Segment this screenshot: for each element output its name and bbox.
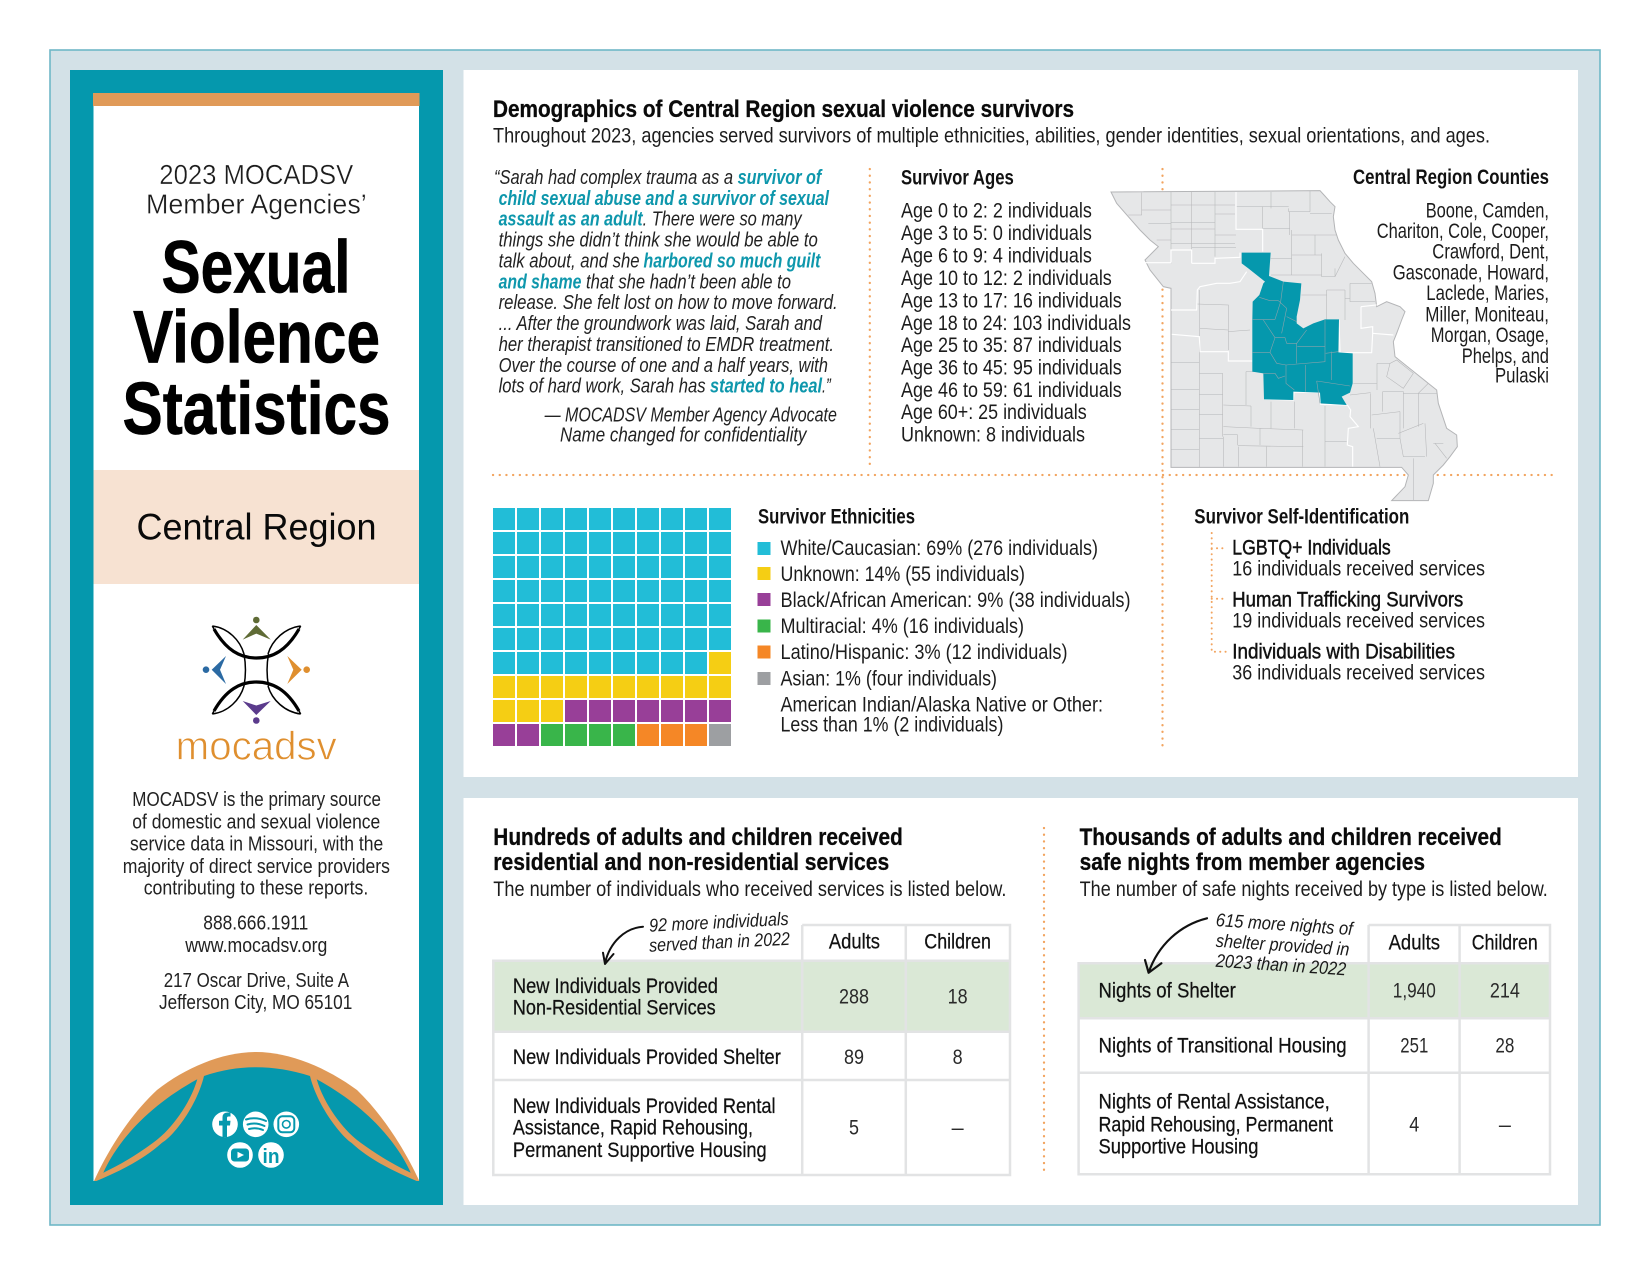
survivor quote: her therapist transitioned to EMDR treatment. [499,333,834,356]
table: individuals served: Non-Residential Services [513,997,716,1020]
survivor quote: things she didn’t think she would be able to [499,229,818,252]
about text: contributing to these reports. [144,877,368,900]
ethnicity legend: Unknown: 14% (55 individuals) [780,563,1025,586]
icon: linkedin: in [262,1146,280,1168]
survivor quote: .” [822,375,832,398]
survivor ages list: Survivor Ages [901,165,1014,189]
table: individuals served: 18 [948,986,968,1009]
map heading and county list: Morgan, Osage, [1431,324,1549,347]
survivor self-identification: 16 individuals received services [1232,558,1485,581]
contact details: 217 Oscar Drive, Suite A [164,969,349,992]
region banner: Central Region [136,507,376,548]
ethnicity legend [758,504,1130,737]
ethnicity legend: Survivor Ethnicities [758,504,915,528]
contact details: 888.666.1911 [203,912,308,935]
survivor ages list: Unknown: 8 individuals [901,424,1085,446]
table: safe nights: 28 [1495,1034,1514,1057]
ethnicity legend: Less than 1% (2 individuals) [780,714,1003,737]
table: individuals served: 8 [953,1046,963,1069]
survivor ages list: Age 25 to 35: 87 individuals [901,334,1122,357]
map heading and county list: Pulaski [1495,365,1549,388]
residential services heading [493,824,1006,901]
callout: 615 more nights: shelter provided in [1215,930,1350,960]
about text: of domestic and sexual violence [132,810,380,833]
sidebar title: Member Agencies’ [146,188,367,220]
map heading and county list: Central Region Counties [1353,165,1549,189]
about text: majority of direct service providers [123,855,390,878]
map heading and county list [1353,165,1549,388]
icon: linkedin [258,1142,284,1168]
table: safe nights: Nights of Transitional Housing [1098,1034,1347,1057]
icon: facebook [212,1112,238,1137]
table: safe nights: 1,940 [1393,979,1436,1002]
survivor ages list [901,165,1131,447]
safe nights heading: Thousands of adults and children received [1080,824,1502,851]
survivor quote: started to heal [710,375,823,398]
demographics heading: Demographics of Central Region sexual violence survivors [493,96,1074,123]
survivor self-identification [1194,504,1485,684]
sidebar title [122,159,390,450]
table: individuals served: Adults [829,930,880,954]
ethnicity legend: Asian: 1% (four individuals) [780,668,997,691]
survivor self-identification: Human Trafficking Survivors [1232,589,1463,612]
section dividers [493,169,1552,747]
map heading and county list: Crawford, Dent, [1432,240,1549,264]
table: individuals served: Permanent Supportive Housing [513,1139,767,1162]
safe nights heading: The number of safe nights received by type is listed below. [1080,878,1548,901]
survivor ages list: Age 10 to 12: 2 individuals [901,267,1112,290]
ethnicity legend: Latino/Hispanic: 3% (12 individuals) [780,641,1068,664]
table: individuals served: 5 [849,1117,859,1140]
residential services heading: Hundreds of adults and children received [493,824,903,851]
survivor quote: harbored so much guilt [644,250,821,272]
survivor ages list: Age 36 to 45: 95 individuals [901,356,1122,380]
icon: spotify [243,1112,268,1137]
sidebar title: Statistics [122,367,390,450]
map heading and county list: Gasconade, Howard, [1393,261,1549,284]
table: individuals served: New Individuals Provided Rental [513,1095,776,1118]
table: safe nights: Nights of Shelter [1098,979,1236,1002]
demographics heading [493,96,1490,148]
ethnicity legend: Multiracial: 4% (16 individuals) [780,615,1024,638]
table: individuals served: 89 [844,1046,864,1069]
table: individuals served: Children [924,930,991,954]
map heading and county list: Chariton, Cole, Cooper, [1377,220,1549,243]
arrow: callout to first row [603,927,643,964]
region banner [94,470,419,584]
demographics heading: Throughout 2023, agencies served survivors of multiple ethnicities, abilities, gender identities, sexual orientations, and ages. [493,125,1490,148]
table: individuals served: 288 [839,986,869,1009]
callout: 615 more nights: 2023 than in 2022 [1214,950,1347,979]
sidebar title: 2023 MOCADSV [159,159,354,190]
ethnicity legend: Black/African American: 9% (38 individuals) [780,589,1130,612]
callout: 615 more nights [1145,909,1355,979]
map heading and county list: Phelps, and [1462,345,1549,368]
icon: instagram [274,1112,299,1137]
table: individuals served: Assistance, Rapid Rehousing, [513,1117,753,1140]
survivor ages list: Age 6 to 9: 4 individuals [901,244,1092,267]
ethnicity legend: American Indian/Alaska Native or Other: [780,694,1103,717]
table: safe nights [1079,925,1550,1174]
residential services heading: residential and non-residential services [493,849,889,876]
waffle chart: ethnicities [493,508,731,746]
sidebar title: Sexual [162,226,350,309]
survivor ages list: Age 13 to 17: 16 individuals [901,290,1122,312]
table: individuals served: New Individuals Provided Shelter [513,1046,781,1069]
central region highlight [1242,253,1353,405]
safe nights heading [1080,824,1548,901]
survivor quote [494,166,838,447]
about text: MOCADSV is the primary source [132,788,381,811]
safe nights heading: safe nights from member agencies [1080,849,1425,876]
survivor quote: that she hadn’t been able to [586,270,791,293]
decorative dome with social icons [94,1052,419,1182]
logo: mocadsv [176,617,337,768]
table: safe nights: Adults [1389,932,1440,954]
icon: youtube [227,1142,253,1168]
callout: 92 more individuals [603,908,791,964]
table: safe nights: Nights of Rental Assistance, [1098,1091,1330,1114]
residential services heading: The number of individuals who received services is listed below. [493,878,1006,901]
panel: services [464,798,1578,1205]
survivor ages list: Age 18 to 24: 103 individuals [901,312,1131,335]
callout: 615 more nights: 615 more nights of [1215,909,1355,939]
table: safe nights: 214 [1490,979,1520,1002]
logo: mocadsv: mocadsv [176,724,337,768]
survivor quote: lots of hard work, Sarah has [499,375,706,398]
survivor self-identification: LGBTQ+ Individuals [1232,537,1391,560]
survivor quote: assault as an adult [499,208,644,231]
table: safe nights: Children [1472,932,1538,954]
survivor quote: and shame [499,270,581,293]
survivor quote: “Sarah had complex trauma as a [494,166,733,189]
survivor quote: Over the course of one and a half years, with [499,354,828,377]
survivor self-identification: 36 individuals received services [1232,661,1485,684]
map: Missouri counties [1111,191,1457,501]
about text [123,788,390,900]
table: safe nights: — [1499,1113,1511,1136]
callout: 92 more individuals: 92 more individuals [649,908,789,936]
map heading and county list: Miller, Moniteau, [1425,303,1549,326]
contact details [159,912,352,1014]
sidebar title: Violence [133,296,380,379]
ethnicity legend: White/Caucasian: 69% (276 individuals) [780,537,1098,560]
survivor quote: release. She felt lost on how to move forward. [499,291,838,314]
contact details: www.mocadsv.org [184,934,327,957]
survivor quote: Name changed for confidentiality [560,424,808,447]
panel: demographics [464,70,1578,777]
table: individuals served: New Individuals Provided [513,975,718,998]
survivor quote: survivor of [738,166,823,189]
survivor quote: talk about, and she [499,250,640,272]
survivor ages list: Age 3 to 5: 0 individuals [901,222,1092,245]
map heading and county list: Boone, Camden, [1426,199,1549,222]
survivor self-identification: 19 individuals received services [1232,609,1485,632]
contact details: Jefferson City, MO 65101 [159,991,352,1014]
about text: service data in Missouri, with the [130,832,383,855]
survivor quote: — MOCADSV Member Agency Advocate [544,404,837,427]
table: safe nights: Supportive Housing [1098,1136,1258,1159]
table: individuals served: — [952,1117,964,1140]
survivor quote: . There were so many [643,208,803,231]
survivor ages list: Age 0 to 2: 2 individuals [901,200,1092,223]
panel: left sidebar [70,70,443,1205]
survivor ages list: Age 60+: 25 individuals [901,401,1087,424]
survivor ages list: Age 46 to 59: 61 individuals [901,379,1122,402]
table: individuals served [493,925,1010,1175]
arrow: callout to shelter row [1145,918,1207,973]
survivor self-identification: Individuals with Disabilities [1232,641,1455,664]
survivor quote: ... After the groundwork was laid, Sarah and [499,312,822,335]
table: safe nights: 4 [1409,1113,1420,1136]
table: safe nights: 251 [1400,1034,1428,1057]
callout: 92 more individuals: served than in 2022 [649,928,791,956]
map heading and county list: Laclede, Maries, [1426,282,1549,305]
survivor self-identification: Survivor Self-Identification [1194,504,1409,528]
survivor quote: child sexual abuse and a survivor of sexual [499,187,830,210]
table: safe nights: Rapid Rehousing, Permanent [1098,1113,1333,1136]
